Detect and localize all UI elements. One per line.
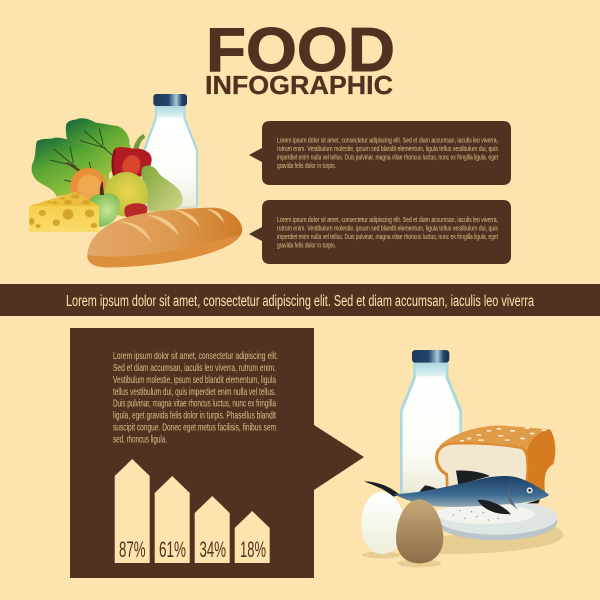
title: INFOGRAPHIC — [205, 70, 393, 100]
icon: green pear — [141, 165, 183, 212]
panel: second callout — [249, 200, 511, 264]
text block: statistics copy: Lorem ipsum dolor sit amet, consectetur adipiscing elit. — [113, 350, 278, 362]
icon: bread slice loaf — [435, 425, 555, 492]
text block: statistics copy — [113, 350, 278, 446]
icon: white egg — [361, 492, 405, 558]
icon: back lettuce leaf — [66, 118, 131, 180]
bar: 87% — [115, 459, 150, 563]
text block: first callout copy: gravida felis dolor in turpis. — [277, 163, 336, 170]
text block: statistics copy: suscipit congue. Donec eget metus facilisis, finibus sem — [113, 422, 276, 434]
icon: green apple — [88, 181, 120, 227]
text block: second callout copy: Lorem ipsum dolor sit amet, consectetur adipiscing elit. Sed et diam accumsan, iaculis leo viverra, — [277, 217, 498, 224]
banner — [0, 284, 600, 316]
illustration: milk, vegetables, cheese and bread — [29, 94, 242, 267]
icon: plate shadow — [440, 524, 563, 554]
text block: statistics copy: ligula, eget gravida felis dolor in turpis. Phasellus blandit — [113, 410, 276, 422]
text block: second callout copy: imperdiet enim nulla vel tellus. Duis pulvinar, magna vitae rhoncus luctus, nunc ex fringilla ligula, eget — [277, 234, 498, 241]
text block: first callout copy — [277, 138, 498, 170]
bar: 61%: 61% — [159, 537, 186, 562]
icon: milk bottle — [143, 94, 198, 207]
text block: statistics copy: Vestibulum molestie, ipsum sed blandit elementum, ligula — [113, 374, 276, 386]
text block: second callout copy: rutrum enim. Vestibulum molestie, ipsum sed blandit elementum, ligula tellus vestibulum dui, quis — [277, 226, 498, 232]
panel: first callout — [249, 121, 511, 185]
icon: cheese wedge — [29, 192, 99, 232]
text block: statistics copy: Duis pulvinar, magna vitae rhoncus luctus, nunc ex fringilla — [113, 398, 276, 410]
icon: yellow pear — [104, 172, 148, 217]
text block: statistics copy: tellus vestibulum dui, quis imperdiet enim nulla vel tellus. — [113, 386, 276, 398]
text block: statistics copy: Sed et diam accumsan, iaculis leo viverra, rutrum enim. — [113, 362, 276, 374]
illustration: milk, bread, fish and eggs — [361, 350, 563, 567]
bar: 34% — [195, 496, 230, 563]
icon: bread loaf — [87, 208, 242, 267]
text block: statistics copy: sed, rhoncus ligula. — [113, 434, 167, 446]
text block: first callout copy: rutrum enim. Vestibulum molestie, ipsum sed blandit elementum, ligula tellus vestibulum dui, quis — [277, 146, 498, 153]
panel: statistics — [70, 328, 364, 578]
icon: brown egg — [396, 499, 443, 567]
text block: first callout copy: Lorem ipsum dolor sit amet, consectetur adipiscing elit. Sed et diam accumsan, iaculis leo viverra, — [277, 138, 498, 144]
chart: arrow bars — [115, 459, 270, 563]
text block: first callout copy: imperdiet enim nulla vel tellus. Duis pulvinar, magna vitae rhoncus luctus, nunc ex fringilla ligula, eget — [277, 154, 498, 162]
icon: red pepper — [112, 134, 152, 177]
text block: second callout copy — [277, 217, 498, 250]
bar: 34%: 34% — [200, 537, 226, 562]
text block: second callout copy: gravida felis dolor in turpis. — [277, 242, 336, 250]
icon: milk bottle — [400, 350, 462, 493]
title: FOOD — [206, 16, 395, 85]
icon: small red fruit — [124, 203, 147, 217]
bar: 87%: 87% — [119, 537, 146, 562]
icon: fish — [364, 471, 549, 514]
icon: peach — [70, 168, 106, 204]
bar: 18%: 18% — [240, 537, 266, 562]
icon: front lettuce leaf — [32, 138, 109, 197]
icon: plate — [435, 500, 557, 540]
bar: 18% — [235, 511, 270, 563]
bar: 61% — [155, 476, 190, 563]
